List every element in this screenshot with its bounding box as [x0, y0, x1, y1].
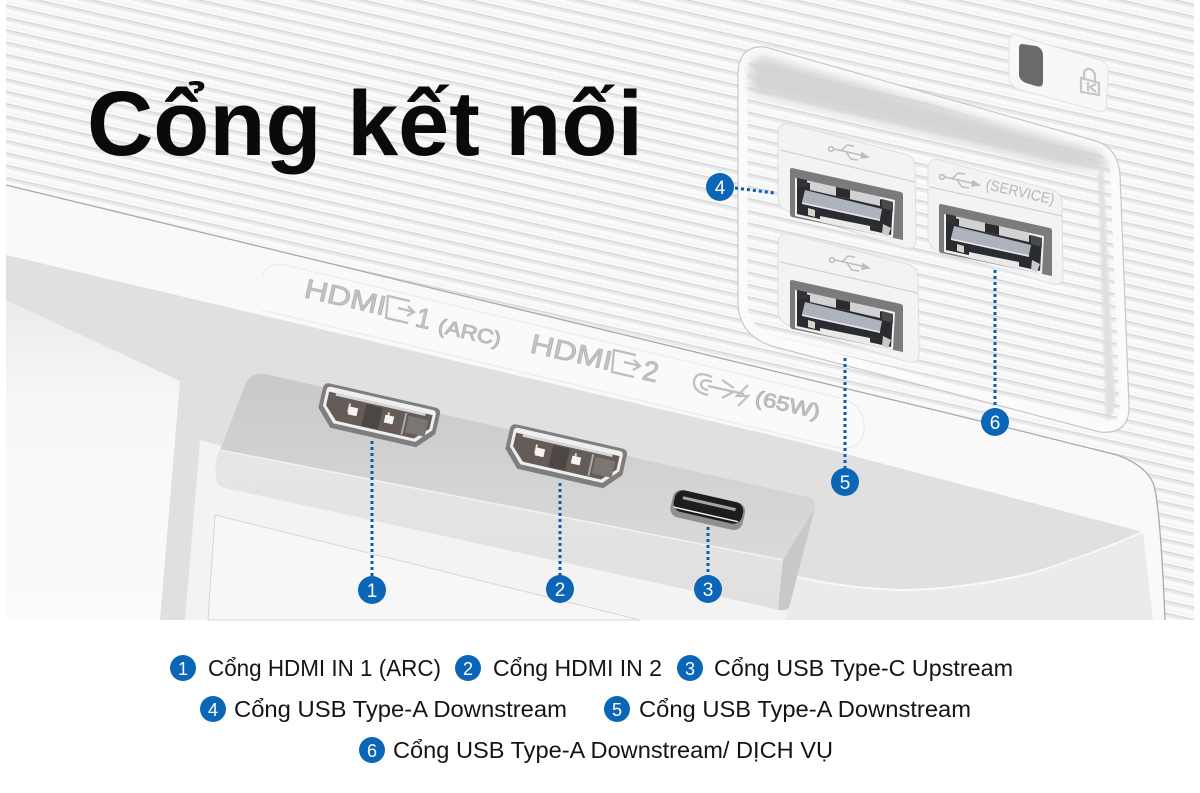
label: HDMI 1 ARC: 1 [413, 302, 435, 335]
label: service: (SERVICE) [984, 176, 1056, 208]
leader line and marker 5 [831, 358, 859, 496]
label: HDMI 2: HDMI [528, 329, 615, 376]
legend item 4: Cổng USB Type-A Downstream [234, 696, 567, 722]
leader line and marker 5: 5 [840, 473, 850, 494]
leader line and marker 2: 2 [555, 580, 565, 601]
label: HDMI 1 ARC: HDMI [302, 274, 389, 321]
icon: lock slot [1019, 44, 1043, 86]
leader line and marker 3 [694, 527, 722, 603]
label: HDMI 1 ARC: (ARC) [436, 315, 503, 351]
HDMI port 1 [315, 382, 441, 451]
USB plate: port 4 [778, 124, 916, 248]
leader line and marker 4: 4 [715, 178, 726, 199]
label: USB-C 65W: (65W) [753, 387, 822, 423]
USB bay recess [738, 47, 1129, 432]
USB plate: port 5 [778, 234, 919, 362]
legend item 6: Cổng USB Type-A Downstream/ DỊCH VỤ [393, 737, 833, 763]
monitor lower body [6, 185, 1165, 620]
legend item 1: Cổng HDMI IN 1 (ARC) [208, 655, 441, 681]
port bar right facet [778, 508, 815, 610]
legend item 4: 4 [208, 700, 218, 720]
legend item 2: 2 [463, 659, 473, 679]
legend item 5: 5 [612, 700, 622, 720]
leader line and marker 6 [981, 270, 1009, 436]
title: Cổng kết nối [87, 73, 643, 175]
inner shadow [750, 57, 1108, 170]
right body highlight [790, 532, 1143, 590]
legend item 2: Cổng HDMI IN 2 [493, 655, 662, 681]
recessed lower panel [208, 515, 640, 620]
background: ribbed monitor back [6, 0, 1194, 620]
USB-C port [669, 488, 747, 532]
lower right surface [785, 532, 1153, 620]
leader line and marker 1: 1 [367, 581, 377, 602]
centre lower surface [185, 440, 790, 620]
legend item 5: Cổng USB Type-A Downstream [639, 696, 971, 722]
label: HDMI 2: 2 [640, 355, 662, 388]
label: HDMI 1 ARC [302, 274, 503, 351]
port bar [216, 374, 815, 610]
leader line and marker 1 [358, 441, 386, 604]
label: USB-C 65W [694, 374, 822, 423]
legend item 6: 6 [367, 741, 377, 761]
security lock plate [1009, 34, 1108, 112]
label strip: printed port names [262, 265, 864, 448]
legend item 3: Cổng USB Type-C Upstream [714, 655, 1013, 681]
legend [170, 655, 1013, 763]
leader line and marker 4 [706, 173, 775, 201]
legend item 1: 1 [178, 659, 188, 679]
grey recessed band [6, 255, 1143, 620]
legend item 3: 3 [685, 659, 695, 679]
leader line and marker 3: 3 [703, 580, 713, 601]
left stand panel [6, 300, 180, 620]
HDMI port 2 [502, 423, 628, 492]
leader line and marker 2 [546, 483, 574, 603]
leader line and marker 6: 6 [990, 413, 1000, 434]
label: HDMI 2 [528, 329, 662, 388]
USB plate: port 6 service [928, 159, 1063, 284]
icon: kensington lock [1081, 69, 1099, 95]
